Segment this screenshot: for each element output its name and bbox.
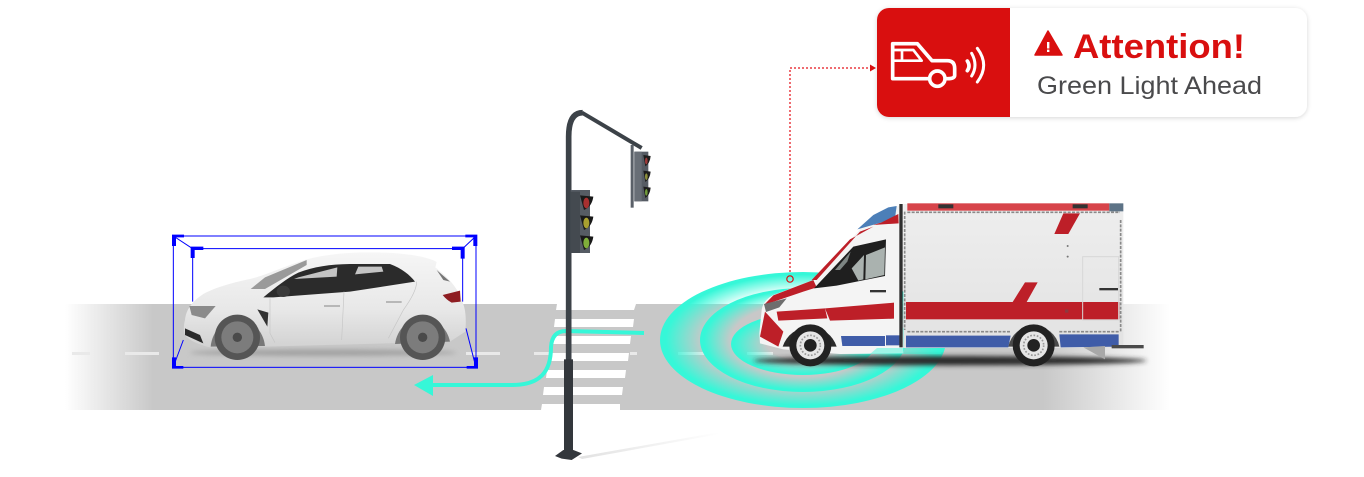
door handle bbox=[870, 290, 886, 292]
upper signal head bbox=[631, 145, 651, 208]
cab pillar bbox=[899, 204, 903, 347]
heading: Attention! bbox=[1073, 28, 1245, 66]
car body bbox=[184, 252, 466, 347]
teal route arrow bbox=[414, 331, 644, 396]
beacon bbox=[857, 206, 897, 229]
white car bbox=[172, 235, 478, 369]
road bbox=[65, 304, 1170, 410]
sensor wave rings bbox=[660, 272, 946, 408]
crosswalk bbox=[541, 304, 636, 410]
pole base bbox=[555, 359, 582, 460]
bounding box bbox=[172, 235, 478, 369]
red icon panel bbox=[877, 8, 1010, 117]
main signal head bbox=[571, 190, 593, 253]
red livery bbox=[760, 203, 1119, 347]
pole bbox=[569, 113, 642, 360]
car shadow bbox=[190, 349, 457, 356]
car door details bbox=[270, 282, 417, 343]
callout card bbox=[877, 8, 1307, 117]
ambulance bbox=[753, 203, 1147, 366]
icon: car with signal bbox=[893, 44, 984, 86]
ambulance box bbox=[903, 204, 1123, 348]
pole shadow bbox=[578, 432, 720, 459]
icon: warning triangle bbox=[1035, 31, 1062, 55]
teal ring strip in front of ambulance underside bbox=[870, 348, 943, 354]
traffic light bbox=[555, 113, 651, 460]
dotted connector bbox=[787, 64, 876, 282]
blue livery bbox=[841, 334, 1119, 347]
ambulance shadow bbox=[753, 356, 1147, 365]
car lights bbox=[185, 291, 461, 343]
subheading: Green Light Ahead bbox=[1037, 72, 1262, 100]
cab body bbox=[759, 205, 903, 354]
ambulance wheels bbox=[783, 324, 1059, 366]
rear step bbox=[1083, 345, 1144, 359]
car wheels bbox=[211, 315, 450, 360]
box details bbox=[905, 203, 1123, 332]
headlight bbox=[764, 298, 787, 312]
car windows bbox=[251, 260, 450, 297]
cab window bbox=[814, 239, 886, 288]
